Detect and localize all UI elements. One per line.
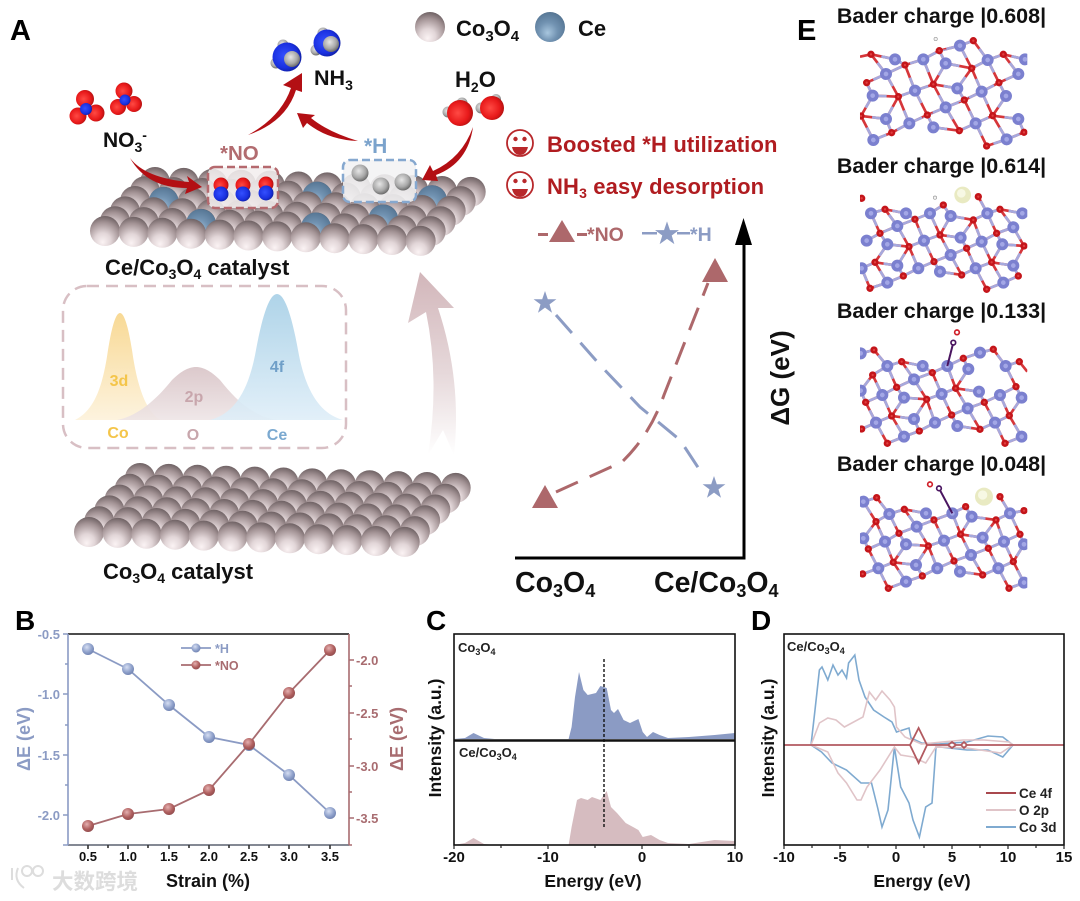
legend: Co 3d [1019, 820, 1057, 835]
label: Co3O4 catalyst: 4 [157, 570, 165, 586]
x tick labels: 1.5 [160, 849, 178, 864]
label: Ce/Co3O4: 3 [497, 752, 502, 762]
label: *H: *H [364, 135, 387, 158]
tick labels [773, 849, 1072, 866]
axis label: Ce/Co3O4: Ce/Co [654, 567, 736, 599]
arrow: *H to NH3 path [297, 113, 358, 141]
label: Ce/Co3O4: 4 [512, 752, 517, 762]
label: H2O: H [455, 67, 471, 92]
area: Ce/Co3O4 DOS [454, 791, 735, 845]
legend: *H: *H [690, 224, 712, 246]
left tick labels [38, 627, 60, 823]
frame [784, 634, 1064, 845]
tick labels: 5 [948, 849, 956, 866]
label: Co: Co [107, 425, 129, 442]
panel label A: A [10, 15, 31, 47]
legend: O 2p [1019, 803, 1049, 818]
structure 2 [862, 187, 1024, 289]
marker: *H Co3O4 [534, 291, 556, 313]
slab: Ce/Co3O4 catalyst [90, 167, 486, 256]
right tick labels: -3.0 [356, 759, 378, 774]
structure 3 [861, 330, 1027, 443]
label: NO3-: - [142, 127, 147, 143]
heading: Bader 0.133: Bader charge |0.133| [837, 299, 1046, 323]
left tick labels: -1.5 [38, 748, 60, 763]
label: Ce/Co3O4: O [830, 639, 840, 654]
peak: Ce 4f [210, 294, 343, 420]
divider [454, 739, 735, 742]
label: Co3O4: Co [458, 640, 475, 655]
peak: Co 3d [75, 313, 160, 420]
line: O 2p [811, 691, 1013, 800]
text: boosted H utilization: Boosted *H utilization [547, 132, 778, 157]
chart: free energy diagram [515, 218, 795, 601]
x axis title: Strain (%) [166, 871, 250, 891]
text: NH3 easy desorption: easy desorption [587, 174, 764, 199]
label: 4f: 4f [270, 359, 285, 376]
label: Co3O4: 4 [490, 647, 496, 657]
label: Ce/Co3O4: O [502, 745, 512, 760]
label: Co3O4 catalyst: O [140, 559, 157, 584]
adsorbed *H box [343, 160, 416, 202]
series: *NO [82, 644, 336, 832]
frame [454, 634, 735, 845]
legend: atom types: Co [456, 16, 485, 41]
legend: *NO: *NO [587, 224, 624, 246]
label: NH3: 3 [345, 77, 353, 93]
label: Co3O4: 3 [475, 647, 480, 657]
legend [181, 642, 239, 673]
marker: *H Ce/Co3O4 [703, 476, 725, 498]
label: Co3O4 catalyst: 3 [132, 570, 140, 586]
legend: *NO [215, 659, 239, 673]
right tick labels: -2.0 [356, 653, 378, 668]
arrow: large upward transformation arrow [408, 272, 456, 455]
tick labels: 0 [892, 849, 900, 866]
label: NH3: NH [314, 66, 345, 90]
legend: *H [642, 221, 712, 246]
label: H2O: 2 [471, 79, 479, 95]
panel label C: C [426, 605, 446, 636]
area: Co3O4 DOS [454, 672, 735, 739]
label: 2p: 2p [185, 389, 204, 406]
label: O: O [187, 427, 199, 444]
axis label: Ce/Co3O4: 3 [736, 581, 746, 601]
right tick labels: -2.5 [356, 706, 378, 721]
heading: Bader 0.608: Bader charge |0.608| [837, 4, 1046, 28]
x tick labels: 2.0 [200, 849, 218, 864]
axis label: Ce/Co3O4: 4 [769, 581, 779, 601]
x tick labels: 3.5 [321, 849, 339, 864]
left tick labels: -1.0 [38, 687, 60, 702]
label: Ce: Ce [267, 427, 287, 444]
axes [63, 634, 354, 849]
label: Ce/Co3O4 catalyst: catalyst [201, 255, 290, 280]
chart D: projected DOS [758, 634, 1072, 891]
text: NH3 easy desorption: NH [547, 174, 579, 199]
right axis title: ΔE (eV) [387, 707, 407, 771]
marker: *NO Co3O4 [532, 485, 558, 508]
tick labels [443, 849, 743, 866]
axis label: Co3O4: 4 [585, 581, 595, 601]
tick labels: -10 [537, 849, 559, 866]
watermark: 大数跨境 [52, 865, 138, 896]
dashed line: *NO [556, 283, 708, 492]
label: *NO: *NO [220, 142, 259, 165]
tick labels: 10 [727, 849, 743, 866]
panel label B: B [15, 605, 35, 636]
label: NO3-: 3 [134, 139, 142, 155]
label: H2O: O [479, 67, 496, 92]
structure 1 [860, 37, 1025, 146]
axis label: Co3O4: 3 [553, 581, 563, 601]
panel label E: E [797, 15, 816, 47]
label: Ce/Co3O4: 4 [840, 646, 845, 656]
axes with arrow [515, 218, 752, 558]
label: Ce/Co3O4 catalyst: Ce/Co [105, 255, 169, 280]
label: Ce/Co3O4: 3 [825, 646, 830, 656]
icon: H2O molecules [442, 94, 504, 126]
label: Ce/Co3O4: Ce/Co [787, 639, 825, 654]
arrow: *NO to NH3 [248, 73, 302, 135]
legend: atom types: O [494, 16, 511, 41]
line: Co 3d [811, 655, 1013, 837]
tick labels: -10 [773, 849, 795, 866]
legend: *H [215, 642, 229, 656]
legend: atom types: 3 [485, 28, 494, 45]
label: Ce/Co3O4 catalyst: O [176, 255, 193, 280]
arrow: NO3- to surface [130, 158, 202, 194]
left axis title: ΔE (eV) [14, 707, 34, 771]
legend: atom types [415, 12, 606, 45]
y axis title: Intensity (a.u.) [425, 679, 445, 797]
axis label: delta G: ΔG (eV) [765, 330, 795, 426]
callout: benefits with smileys [507, 130, 778, 201]
watermark [12, 865, 138, 896]
left tick labels: -2.0 [38, 808, 60, 823]
label: Ce/Co3O4: Ce/Co [459, 745, 497, 760]
legend: atom types: 4 [511, 28, 520, 45]
label: Co3O4 catalyst: catalyst [165, 559, 254, 584]
text: NH3 easy desorption: 3 [579, 185, 587, 201]
x tick labels: 3.0 [280, 849, 298, 864]
icon: smiley 1 [507, 130, 533, 156]
label: Co3O4 catalyst: Co [103, 559, 132, 584]
panel: orbital overlap inset [63, 286, 346, 448]
x tick labels: 0.5 [79, 849, 97, 864]
legend: *NO [538, 220, 624, 246]
peak: O 2p [117, 367, 277, 420]
heading: Bader 0.614: Bader charge |0.614| [837, 154, 1046, 178]
icon: NH3 molecules [270, 28, 340, 72]
x ticks [454, 845, 735, 849]
label: Co3O4: O [480, 640, 490, 655]
tick labels: -20 [443, 849, 465, 866]
heading: Bader 0.048: Bader charge |0.048| [837, 452, 1046, 476]
x tick labels [79, 849, 339, 864]
dashed line: *H [556, 315, 705, 478]
series: *H [82, 643, 336, 819]
x axis title: Energy (eV) [873, 871, 971, 891]
axis label: Co3O4: Co [515, 567, 553, 599]
arrow: H2O to surface [422, 127, 473, 181]
legend: Ce 4f [1019, 786, 1053, 801]
icon: smiley 2 [507, 172, 533, 198]
tick labels: -5 [833, 849, 847, 866]
line: Ce 4f [784, 728, 1064, 763]
dotted reference line [603, 659, 605, 828]
structure 4 [863, 482, 1024, 588]
slab: Co3O4 catalyst [74, 463, 471, 557]
marker: *NO Ce/Co3O4 [702, 258, 728, 282]
x axis title: Energy (eV) [544, 871, 642, 891]
tick labels: 0 [638, 849, 646, 866]
right tick labels [356, 653, 378, 826]
right tick labels: -3.5 [356, 811, 378, 826]
label: Ce/Co3O4 catalyst: 3 [169, 266, 177, 282]
panel: Bader charge structures [837, 4, 1046, 588]
icon: NO3- molecules [70, 82, 142, 124]
axis label: Co3O4: O [563, 567, 585, 599]
label: NO3-: NO [103, 129, 134, 152]
axis label: Ce/Co3O4: O [746, 567, 769, 599]
tick labels: 15 [1056, 849, 1072, 866]
label: 3d: 3d [110, 373, 128, 390]
x tick labels: 1.0 [119, 849, 137, 864]
legend [986, 786, 1057, 835]
x tick labels: 2.5 [240, 849, 258, 864]
label: Ce/Co3O4 catalyst: 4 [193, 266, 201, 282]
x ticks [784, 845, 1064, 849]
tick labels: 10 [1000, 849, 1016, 866]
panel label D: D [751, 605, 771, 636]
chart B: adsorption energy vs strain [14, 627, 407, 891]
chart C: DOS comparison [425, 634, 743, 891]
legend: atom types: Ce [578, 16, 606, 41]
adsorbed *NO box [208, 167, 278, 208]
left tick labels: -0.5 [38, 627, 60, 642]
y axis title: Intensity (a.u.) [758, 679, 778, 797]
